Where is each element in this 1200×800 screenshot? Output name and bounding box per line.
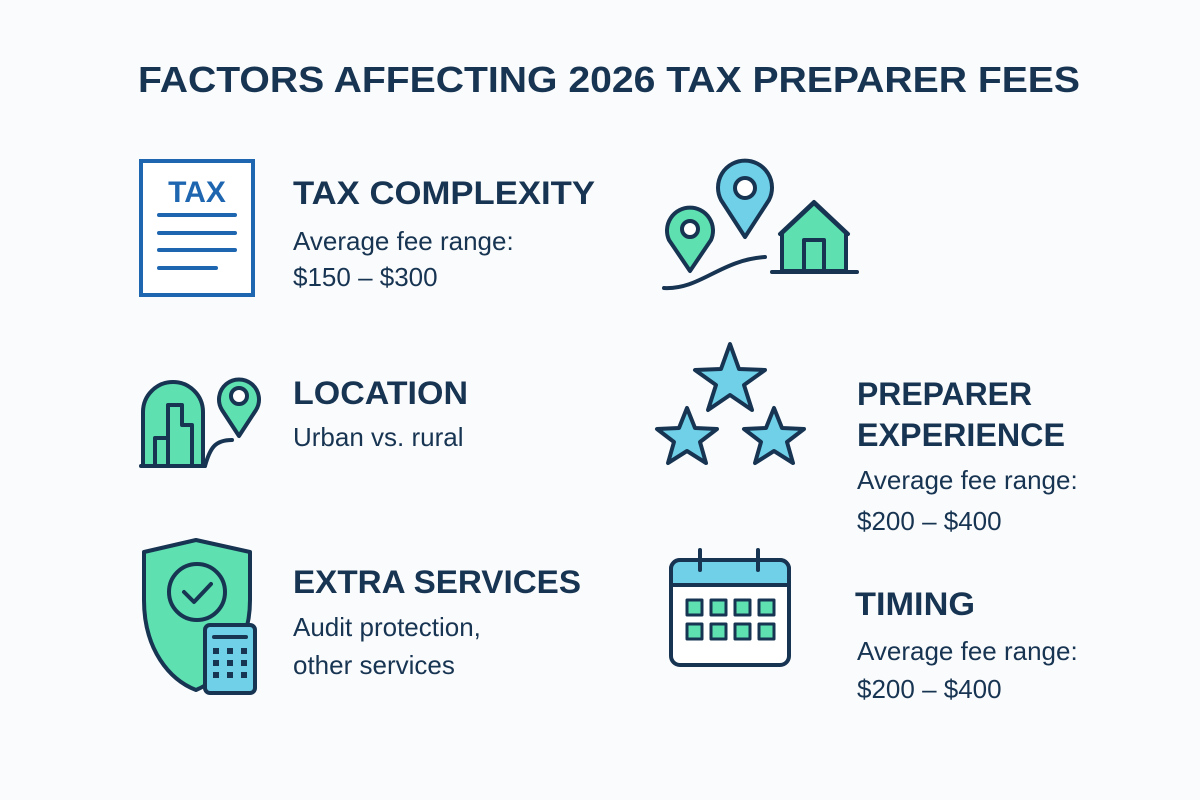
text: extra services: other services bbox=[293, 650, 455, 680]
text: tax complexity: Average fee range: bbox=[293, 226, 514, 256]
icon: tax document bbox=[141, 161, 253, 295]
text: timing bbox=[855, 586, 1078, 704]
text: timing: Average fee range: bbox=[857, 636, 1078, 666]
title: FACTORS AFFECTING 2026 TAX PREPARER FEES bbox=[138, 59, 1080, 100]
text: tax complexity: $150 – $300 bbox=[293, 262, 438, 292]
text: preparer experience: EXPERIENCE bbox=[857, 417, 1065, 453]
text: extra services: Audit protection, bbox=[293, 612, 481, 642]
text: extra services bbox=[293, 564, 581, 680]
icon: location (city and pin) bbox=[141, 379, 259, 466]
text: preparer experience: PREPARER bbox=[857, 376, 1032, 412]
icon: calendar bbox=[671, 550, 789, 665]
text: location: Urban vs. rural bbox=[293, 422, 464, 452]
text: preparer experience: $200 – $400 bbox=[857, 506, 1002, 536]
icon: pins and house bbox=[664, 161, 857, 288]
text: extra services: EXTRA SERVICES bbox=[293, 564, 581, 600]
icon: shield with calculator bbox=[144, 540, 255, 693]
text: tax complexity bbox=[293, 175, 595, 292]
text: timing: $200 – $400 bbox=[857, 674, 1002, 704]
text: timing: TIMING bbox=[855, 586, 975, 622]
text: tax complexity: TAX COMPLEXITY bbox=[293, 175, 595, 211]
icon: tax document: TAX bbox=[168, 176, 226, 209]
icon: three stars bbox=[657, 344, 804, 463]
text: preparer experience: Average fee range: bbox=[857, 465, 1078, 495]
text: preparer experience bbox=[857, 376, 1078, 536]
text: location bbox=[293, 375, 468, 452]
text: location: LOCATION bbox=[293, 375, 468, 411]
